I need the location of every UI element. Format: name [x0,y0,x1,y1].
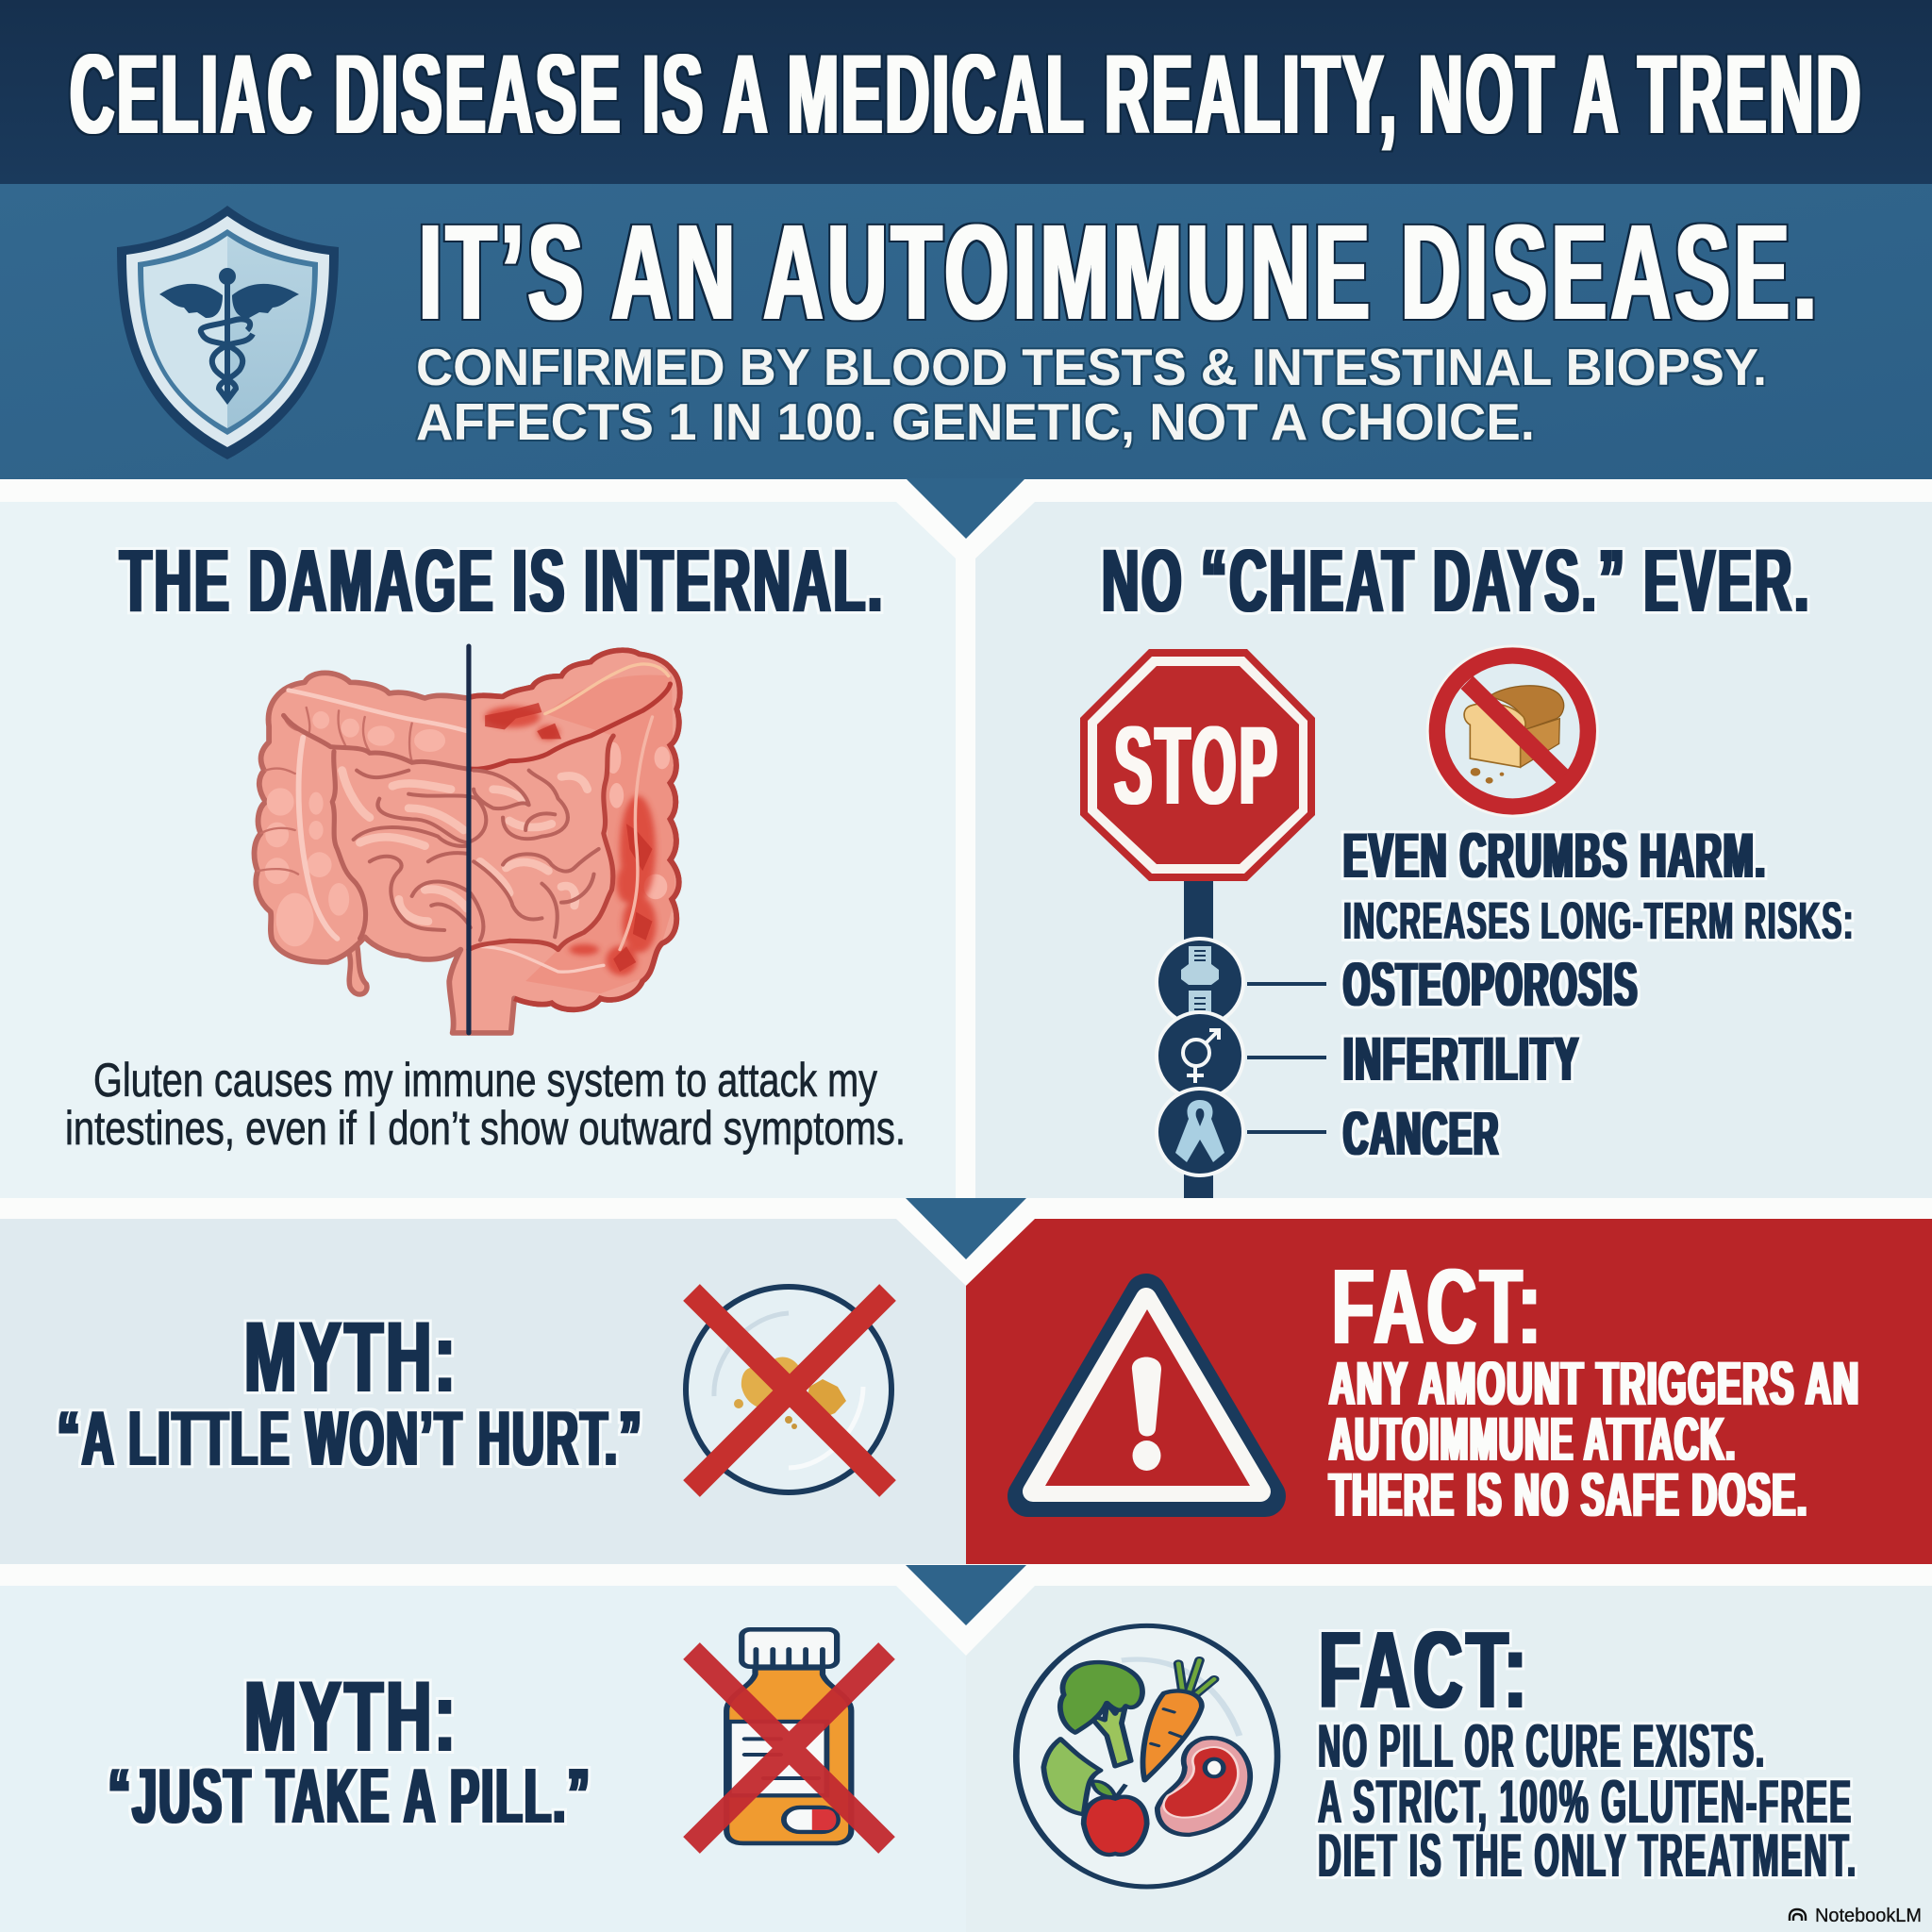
appendix [348,943,367,994]
text: gluten explanation [65,1054,906,1155]
text: fact 2 label: FACT: [1319,1608,1530,1731]
watermark: NotebookLM: NotebookLM [1815,1906,1922,1926]
arrow: banner pointer [906,478,1025,539]
colon highlight lines [289,664,669,972]
icon: crossed-out pill bottle [691,1629,887,1845]
text: gluten explanation: Gluten causes my immune system to attack my [93,1054,877,1107]
inflamed patches [485,707,657,975]
icon: healthy food plate [1016,1625,1277,1887]
risk: cancer [1157,1089,1500,1175]
colon inner boundaries [284,684,670,950]
icon: warning triangle [1028,1294,1265,1496]
text: fact label: FACT: [1332,1247,1544,1366]
dark lesions [485,703,652,972]
leaf [1043,1739,1101,1814]
apple [1115,1785,1125,1799]
haustra folds on colon [258,708,412,874]
text: confirmed by tests: CONFIRMED BY BLOOD TESTS & INTESTINAL BIOPSY. [416,338,1767,396]
risk: infertility: INFERTILITY [1343,1024,1580,1093]
text: myth 1 label: MYTH: [244,1300,458,1413]
risk: infertility [1157,1012,1580,1099]
icon: sign pole [1184,877,1213,1198]
panel: fact any amount [906,1198,1932,1564]
arrow: fact pointer [906,1198,1026,1259]
text: affects 1 in 100: AFFECTS 1 IN 100. GENETIC, NOT A CHOICE. [416,392,1535,451]
panel: myth a little won't hurt [0,1219,966,1564]
text: myth 1 quote: “A LITTLE WON’T HURT.” [58,1394,643,1482]
arrow: second fact pointer [906,1565,1026,1625]
icon: caduceus shield [117,206,339,459]
panel: autoimmune disease banner [0,184,1932,539]
panel: no cheat days [975,502,1932,1198]
panel: fact gluten-free diet [906,1565,1932,1932]
carrot [1178,1660,1214,1695]
text: myth 2 label: MYTH: [244,1659,458,1773]
damaged half tint [525,675,675,993]
text: fact body [1329,1348,1860,1529]
text: myth 2 quote: “JUST TAKE A PILL.” [108,1752,591,1840]
small intestine folds [354,771,599,941]
icon: stop sign [1080,649,1315,881]
risk: osteoporosis: OSTEOPOROSIS [1343,949,1639,1019]
divider line [461,646,475,1033]
icon: crossed-out plate with crumbs [686,1287,891,1492]
small intestine tube highlights [342,771,588,922]
broccoli [1088,1701,1131,1766]
panel: the damage is internal [0,502,956,1198]
risk: osteoporosis [1157,939,1639,1025]
icon: no bread [1426,644,1599,818]
panel: myth just take a pill [0,1586,966,1932]
icon: stop sign: STOP [1114,704,1280,828]
heading: damage: THE DAMAGE IS INTERNAL. [120,531,885,631]
title banner [0,0,1932,184]
text: fact 2 body [1318,1711,1857,1890]
steak [1158,1738,1250,1835]
colon highlights and haustra [265,711,670,946]
illustration: intestines healthy vs damaged [255,646,680,1033]
text: gluten explanation: intestines, even if I don’t show outward symptoms. [65,1102,906,1155]
risk: cancer: CANCER [1343,1098,1500,1168]
